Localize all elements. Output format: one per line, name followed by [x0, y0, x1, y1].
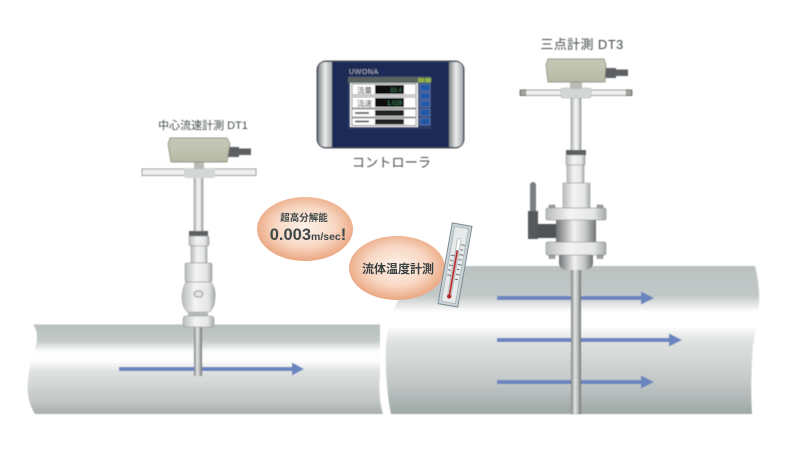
callout: high resolution	[257, 197, 353, 261]
row: flow rate: 83.4	[390, 88, 403, 94]
row: flow rate: 流量	[357, 85, 372, 95]
DT1 connector	[227, 147, 251, 157]
DT3 T-joint	[561, 88, 591, 98]
status indicators	[418, 78, 431, 82]
DT1 T-bar	[142, 169, 256, 176]
DT3 neck	[570, 81, 582, 89]
DT3 flanged fitting	[546, 150, 606, 270]
side buttons	[420, 84, 430, 125]
DT3 bar screws	[520, 90, 632, 96]
title: DT3: 三点計測 DT3	[540, 37, 624, 52]
callout heading: 超高分解能	[280, 212, 328, 224]
DT3 T-bar	[520, 90, 632, 96]
row: total one	[352, 109, 416, 117]
DT1 fitting	[182, 231, 215, 327]
DT1 upper pole	[194, 176, 203, 232]
instrument: DT3 three-point probe	[520, 37, 632, 414]
DT3 connector	[604, 68, 628, 78]
DT3 transmitter box	[546, 59, 606, 82]
right grip	[449, 62, 463, 147]
instrument: DT1 center velocity probe	[142, 118, 256, 376]
logo: UWONA	[349, 69, 379, 76]
row: flow rate	[352, 84, 416, 95]
row: flow velocity: 流速	[357, 98, 372, 108]
callout: fluid temperature: 流体温度計測	[362, 261, 434, 276]
left grip	[318, 62, 332, 147]
DT1 neck	[194, 161, 204, 169]
controller label: コントローラ	[352, 155, 431, 170]
arrow: middle flow	[497, 334, 682, 346]
title: DT1: 中心流速計測 DT1	[158, 118, 248, 132]
DT3 probe shaft	[571, 268, 581, 414]
callout value: 0.003m/sec!	[270, 226, 346, 244]
screen body	[350, 83, 418, 127]
controller casing	[317, 61, 464, 148]
callout: fluid temperature	[349, 236, 445, 300]
arrow: center flow	[119, 362, 304, 376]
screen header	[348, 77, 431, 83]
pipe: left small pipe with flow arrow	[28, 324, 383, 414]
arrow: upper flow	[497, 292, 654, 304]
arrow: lower flow	[497, 376, 654, 388]
DT1 transmitter box	[168, 138, 230, 162]
screen	[348, 76, 431, 129]
DT3 upper pole	[571, 96, 581, 152]
row: flow velocity: 1.029	[387, 101, 403, 107]
row: total two	[352, 118, 416, 126]
DT1 T-joint	[184, 168, 215, 178]
DT3 valve handle	[528, 182, 556, 239]
pipe: right large pipe with three flow arrows	[386, 266, 759, 414]
icon: thermometer	[438, 223, 472, 307]
DT1 probe shaft	[194, 326, 202, 376]
row: flow velocity	[352, 97, 416, 108]
controller panel	[317, 61, 464, 170]
